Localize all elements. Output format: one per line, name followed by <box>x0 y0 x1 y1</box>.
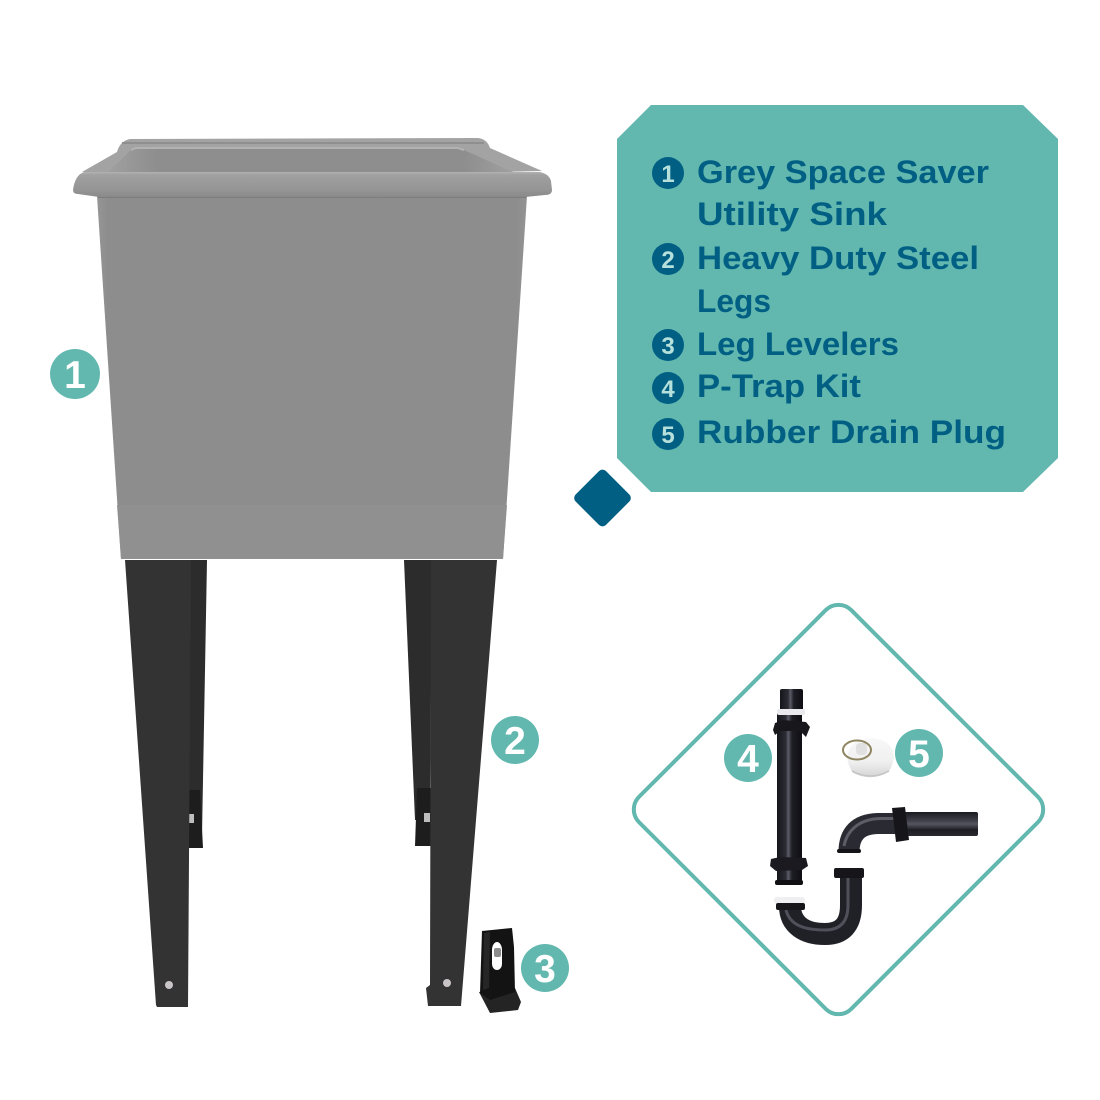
icon: tailpiece pipe <box>770 689 810 885</box>
icon: P-trap J bend <box>774 868 864 934</box>
number badge 3: 3 <box>534 948 556 991</box>
number badge 1: 1 <box>64 354 86 397</box>
panel background <box>617 105 1058 492</box>
number badge 4 <box>724 734 772 782</box>
number badge 1 <box>50 349 100 399</box>
number badge 3 <box>521 944 569 992</box>
list item 3: Leg Levelers <box>697 326 899 362</box>
list item 5: 5 <box>661 422 675 449</box>
icon: rubber drain plug <box>843 738 894 777</box>
number badge 5 <box>895 729 943 777</box>
icon: blue diamond accent <box>572 468 633 528</box>
icon: elbow pipe <box>837 807 978 853</box>
list item 3: 3 <box>661 333 675 360</box>
left leg <box>125 560 207 1007</box>
right leg <box>404 560 497 1006</box>
panel: accessories diamond outline <box>626 597 1051 1022</box>
list item 1 <box>652 154 989 232</box>
panel: parts list <box>617 105 1058 492</box>
number badge 4: 4 <box>737 738 759 781</box>
number badge 2 <box>491 716 539 764</box>
list item 5: Rubber Drain Plug <box>697 414 1006 450</box>
icon: leg leveler <box>479 928 521 1013</box>
tub rim <box>73 138 552 197</box>
list item 2: Legs <box>697 283 771 319</box>
list item 4: 4 <box>661 376 675 403</box>
tub body <box>97 196 527 559</box>
list item 1: 1 <box>661 161 675 188</box>
list item 2: Heavy Duty Steel <box>697 240 979 276</box>
list item 2 <box>652 240 979 319</box>
list item 2: 2 <box>661 247 675 274</box>
list item 4: P-Trap Kit <box>697 368 861 404</box>
sink tub <box>73 138 552 559</box>
number badge 2: 2 <box>504 720 526 763</box>
list item 1: Grey Space Saver <box>697 154 989 190</box>
list item 1: Utility Sink <box>697 196 887 232</box>
number badge 5: 5 <box>908 733 930 776</box>
